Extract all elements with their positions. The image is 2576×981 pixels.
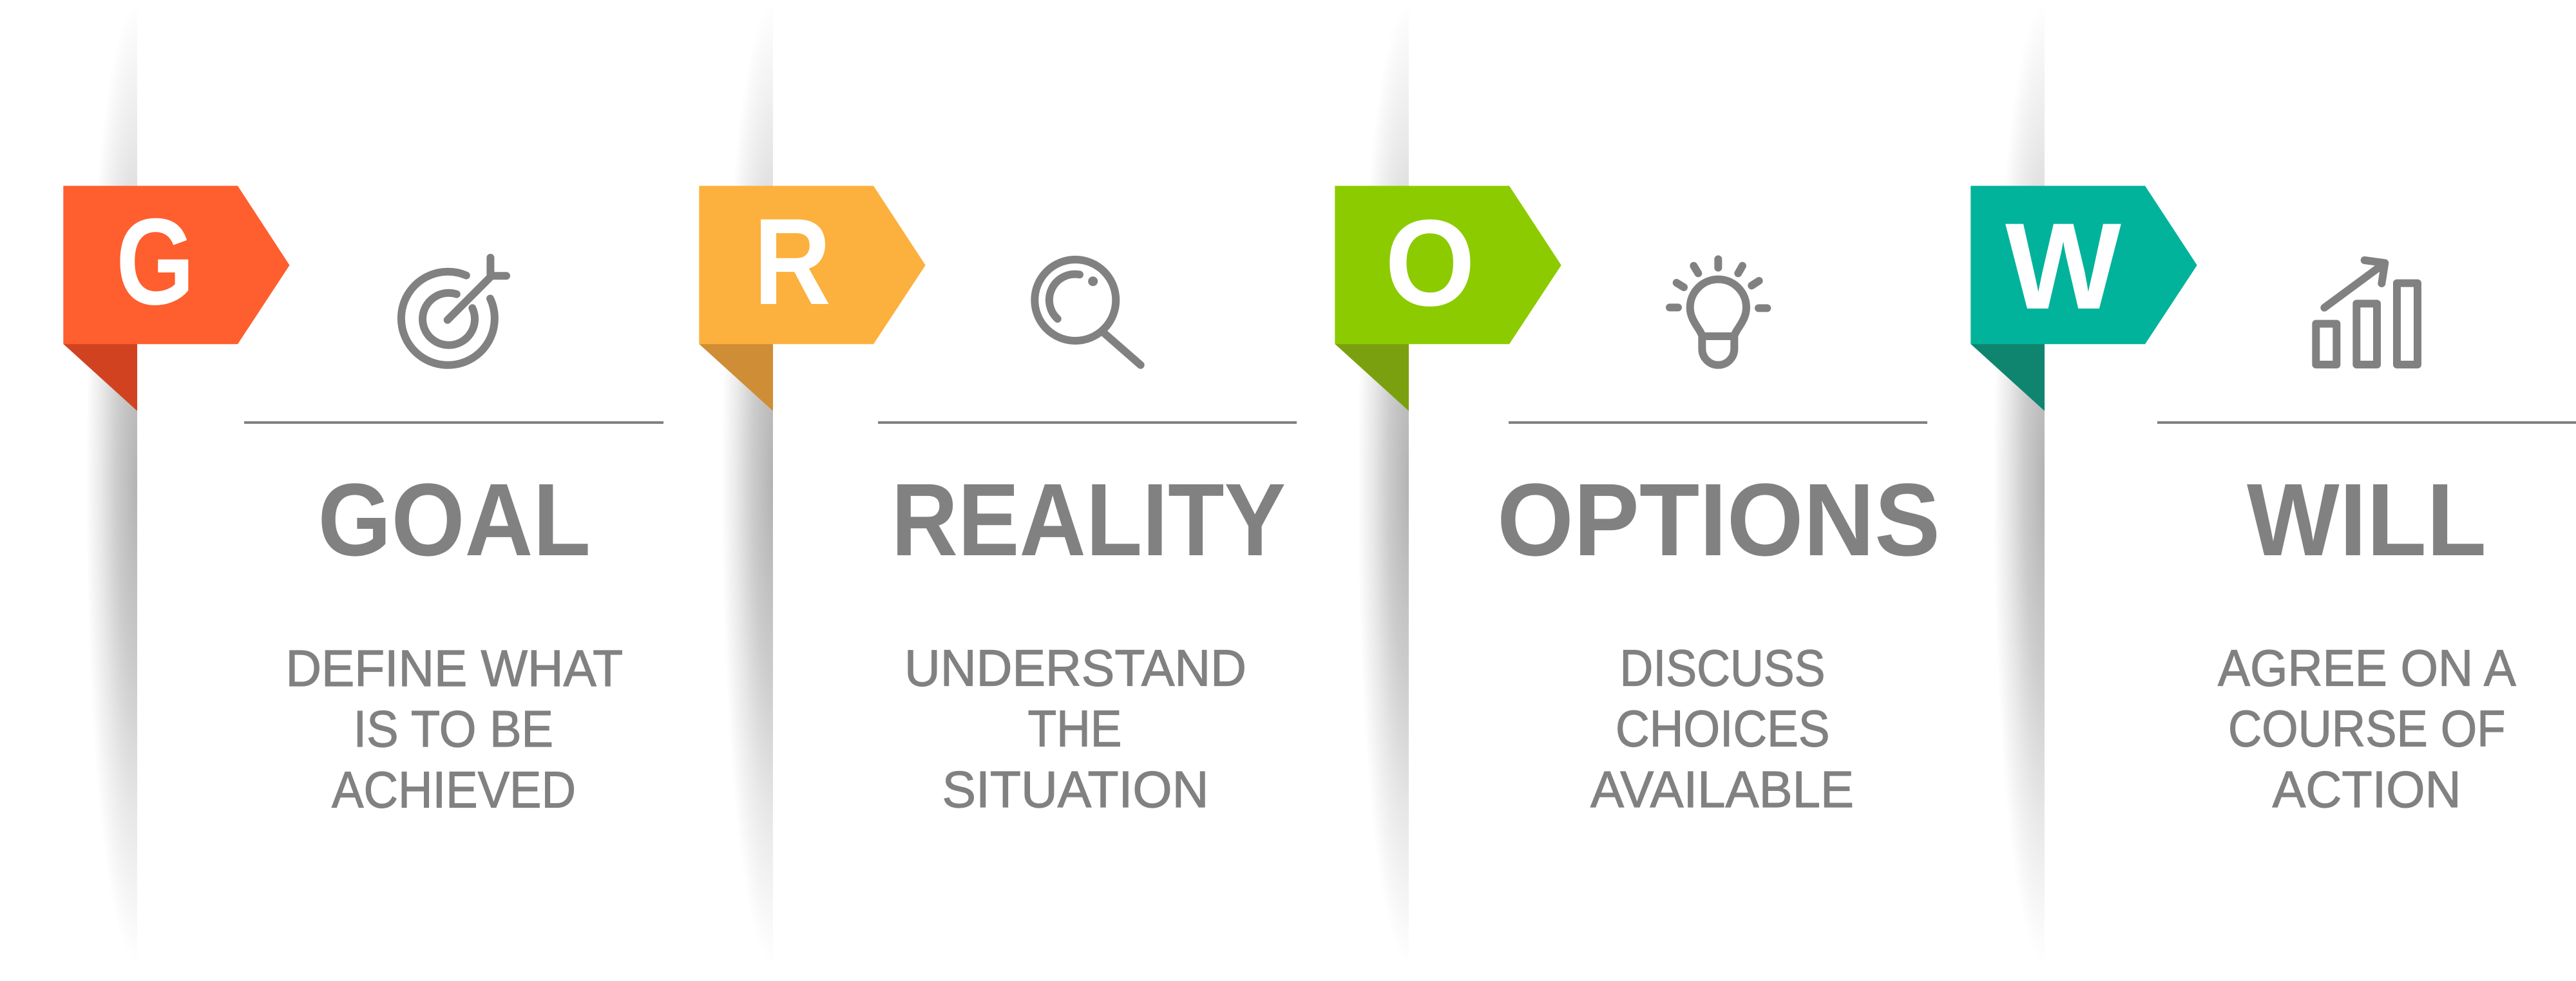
heading: goal: GOAL <box>318 462 591 577</box>
text: goal description: DEFINE WHAT <box>286 640 623 697</box>
divider: reality <box>878 421 1297 424</box>
fold: will flag <box>1970 344 2045 411</box>
panel: will <box>1970 1 2576 965</box>
heading: reality: REALITY <box>892 462 1286 577</box>
text: reality description <box>904 640 1246 818</box>
fold: reality flag <box>699 344 773 411</box>
panel: options <box>1335 1 1940 965</box>
text: will description: COURSE OF <box>2228 700 2506 757</box>
text: will description <box>2218 640 2517 818</box>
text: will description: ACTION <box>2273 761 2461 818</box>
text: goal description: IS TO BE <box>353 700 553 757</box>
text: reality description: THE <box>1028 700 1122 757</box>
text: options description: CHOICES <box>1616 700 1829 757</box>
heading: options: OPTIONS <box>1497 462 1940 577</box>
divider: options <box>1509 421 1927 424</box>
divider: will <box>2157 421 2576 424</box>
text: options description: DISCUSS <box>1619 640 1826 697</box>
fold: goal flag <box>63 344 137 411</box>
text: options description <box>1590 640 1854 818</box>
flag: O: O <box>1385 195 1475 332</box>
icon: growth bar chart with arrow <box>2316 260 2418 365</box>
flag: O <box>1335 186 1561 344</box>
text: options description: AVAILABLE <box>1590 761 1854 818</box>
divider: goal <box>244 421 663 424</box>
flag: G: G <box>116 193 195 330</box>
text: reality description: UNDERSTAND <box>904 640 1246 697</box>
heading: will: WILL <box>2247 462 2486 577</box>
text: will description: AGREE ON A <box>2218 640 2517 697</box>
icon: light bulb <box>1670 259 1767 365</box>
flag: G <box>63 186 290 344</box>
panel: reality <box>699 1 1297 965</box>
flag: W: W <box>2005 198 2122 335</box>
icon: magnifying glass <box>1035 260 1141 365</box>
flag: R <box>699 186 926 344</box>
flag: W <box>1970 186 2197 344</box>
flag: R: R <box>754 193 831 330</box>
text: reality description: SITUATION <box>942 761 1208 818</box>
text: goal description <box>286 640 623 818</box>
panel: goal <box>63 1 663 965</box>
text: goal description: ACHIEVED <box>332 761 576 818</box>
icon: target with dart <box>401 258 506 365</box>
fold: options flag <box>1335 344 1409 411</box>
